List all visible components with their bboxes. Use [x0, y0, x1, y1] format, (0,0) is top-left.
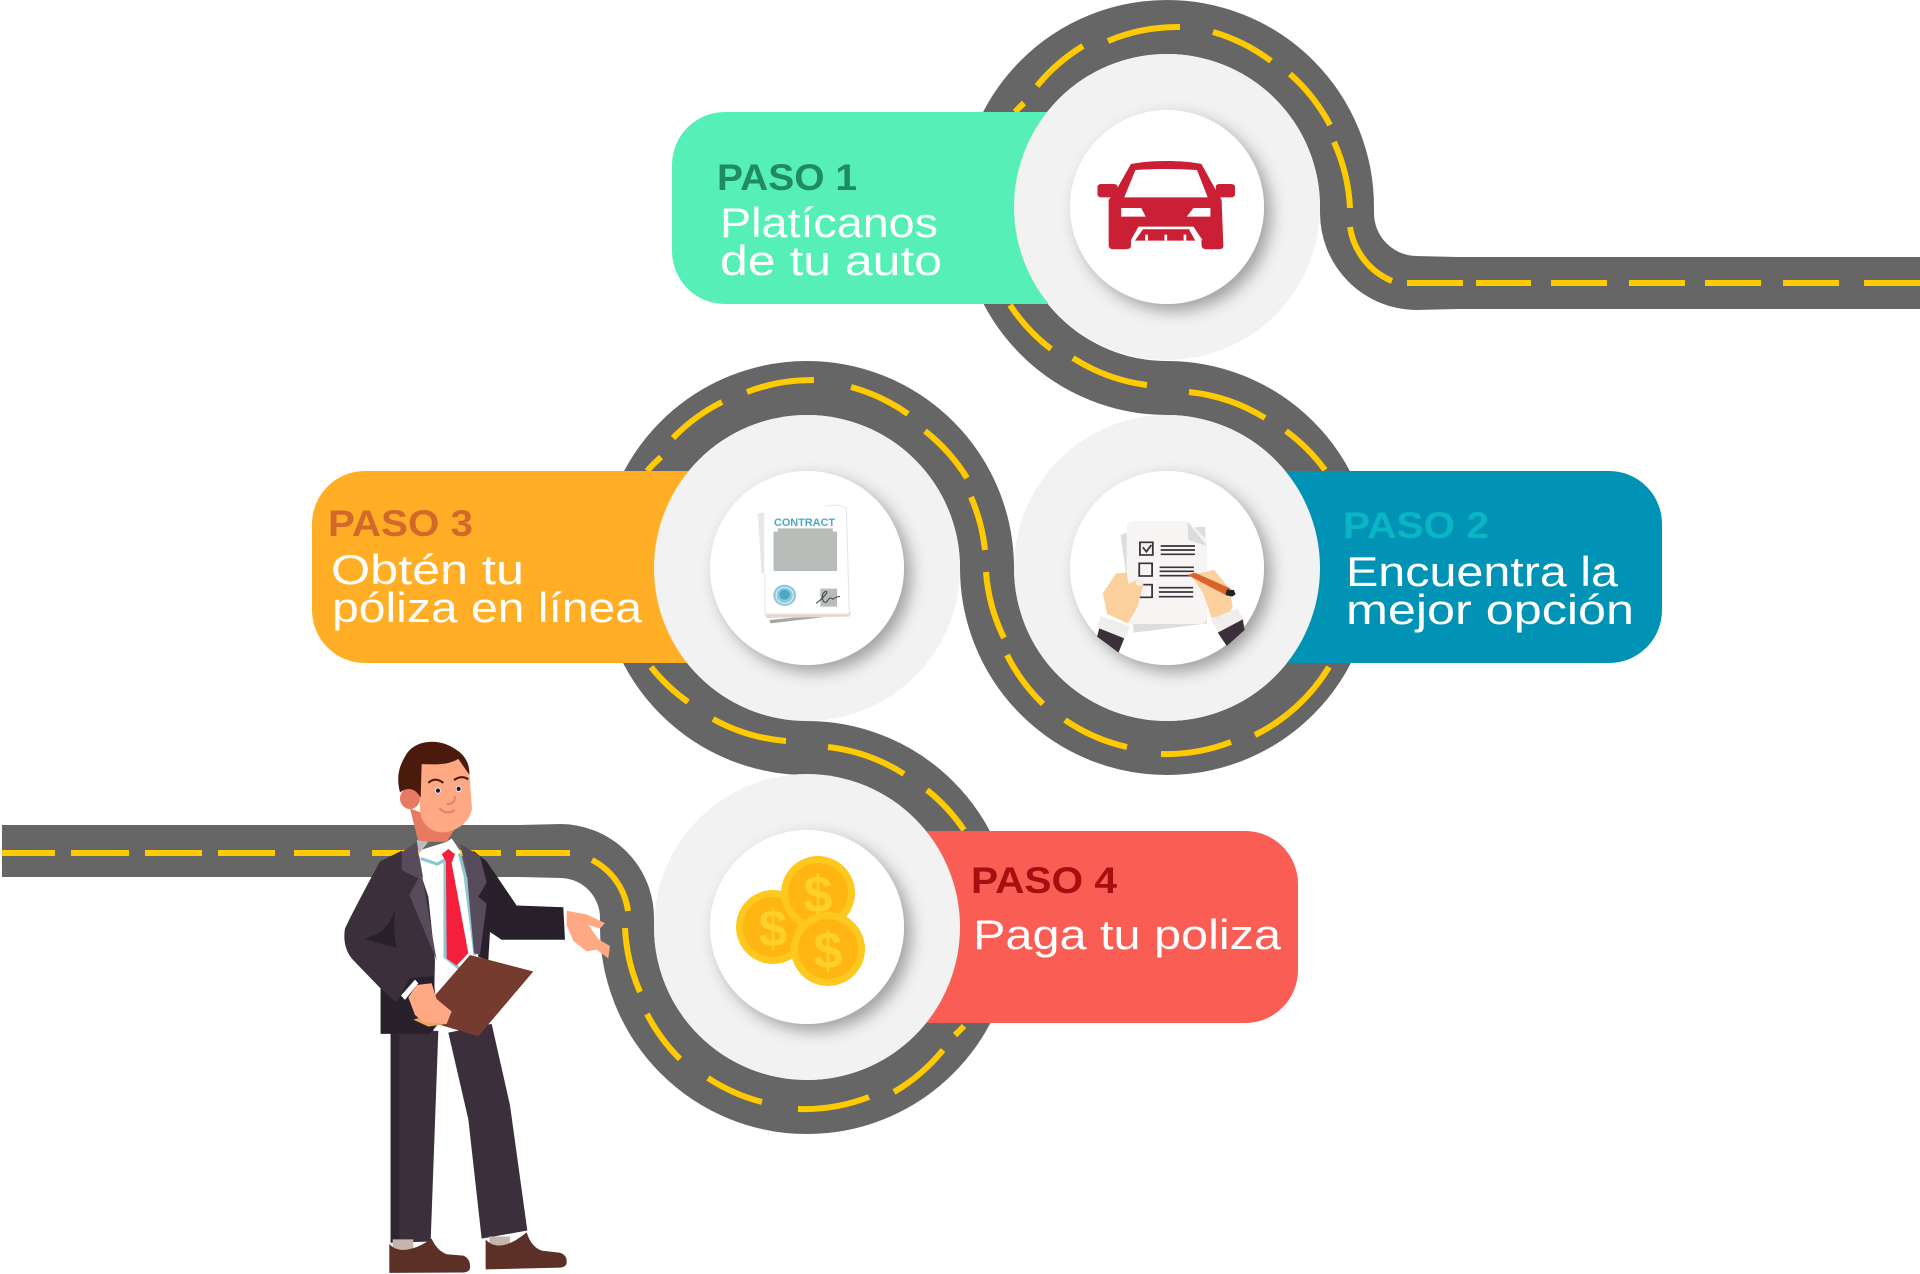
icon: checklist with hands: [1097, 521, 1245, 653]
icon: contract document: [758, 505, 851, 623]
paso 3 text: [331, 546, 643, 631]
card: paso 3: [312, 471, 812, 663]
paso 2 text: [1346, 548, 1634, 633]
paso 1 heading: PASO 1: [717, 157, 857, 198]
card: paso 1: [672, 112, 1152, 304]
paso 3 text: póliza en línea: [332, 584, 643, 631]
card: paso 2: [1180, 471, 1662, 663]
paso 3 text: Obtén tu: [331, 546, 524, 593]
icon: contract document: CONTRACT: [774, 517, 835, 529]
step 1 circle: [1014, 54, 1320, 360]
icon: gold coins: $: [759, 900, 788, 958]
icon: gold coins: $: [804, 866, 833, 924]
step 3 circle: [654, 415, 960, 721]
icon: car: [1097, 161, 1235, 249]
step 4 circle: [654, 774, 960, 1080]
icon: gold coins: $: [814, 922, 843, 980]
businessman with clipboard: [344, 742, 610, 1273]
paso 2 text: mejor opción: [1346, 586, 1634, 633]
step 2 circle: [1014, 415, 1320, 721]
paso 4 text: Paga tu poliza: [973, 911, 1282, 958]
paso 2 text: Encuentra la: [1346, 548, 1619, 595]
paso 3 heading: PASO 3: [328, 503, 473, 544]
paso 1 text: Platícanos: [720, 199, 938, 246]
paso 2 heading: PASO 2: [1343, 505, 1489, 546]
paso 1 text: de tu auto: [720, 237, 942, 284]
icon: gold coins: [736, 856, 865, 986]
paso 1 text: [720, 199, 942, 284]
card: paso 4: [820, 831, 1298, 1023]
paso 4 heading: PASO 4: [971, 860, 1117, 901]
